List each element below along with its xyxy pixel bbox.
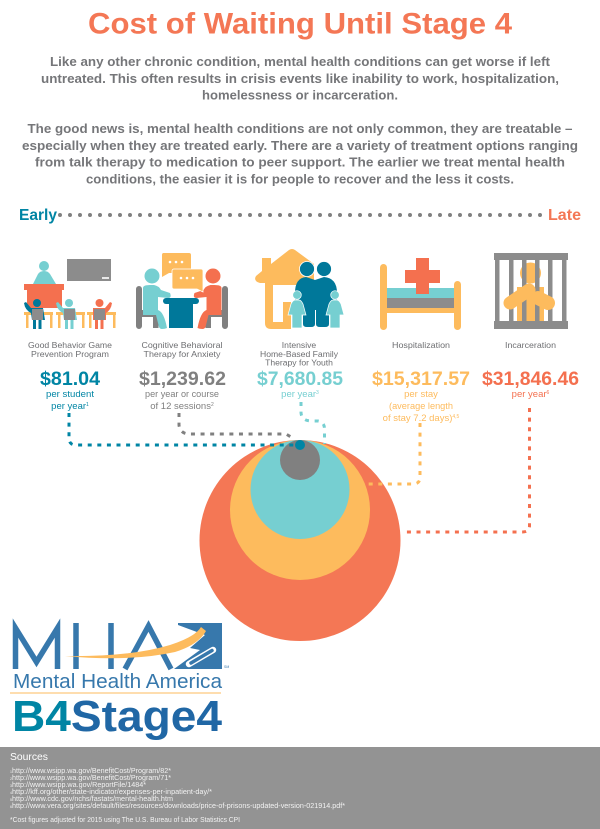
- logo: MHA: Mental Health America: [13, 671, 223, 693]
- column: intensive home-based family therapy: Home-Based Family: [260, 349, 339, 359]
- column: cognitive behavioral therapy: Therapy for Anxiety: [144, 349, 221, 359]
- column: cognitive behavioral therapy: 2: [211, 402, 214, 408]
- intro text block: The good news is, mental health conditions are not only common, they are treatable –: [28, 122, 573, 136]
- column: intensive home-based family therapy: $7,680.85: [257, 369, 343, 390]
- column: incarceration: per year: [512, 389, 547, 400]
- logo: MHA: SM: [224, 665, 229, 669]
- sources panel: http://kff.org/other/state-indicator/expenses-per-inpatient-day/*: [12, 789, 212, 796]
- column: good behavior game: per year: [51, 401, 86, 412]
- column: cognitive behavioral therapy: [139, 340, 226, 412]
- intro text block: homelessness or incarceration.: [202, 88, 398, 102]
- intro text block: [22, 55, 578, 186]
- title: Cost of Waiting Until Stage 4: [88, 8, 512, 40]
- nested cost circles: [200, 440, 400, 641]
- column: hospitalization: per stay: [404, 389, 438, 400]
- column: cognitive behavioral therapy: $1,239.62: [139, 369, 226, 390]
- sources panel: [0, 747, 600, 829]
- logo: MHA: [10, 623, 229, 741]
- column: good behavior game: per student: [46, 389, 94, 400]
- sources panel: 5: [10, 798, 12, 802]
- early to late timeline: Late: [548, 207, 581, 224]
- column: hospitalization: Hospitalization: [392, 340, 450, 350]
- sources panel: 6: [10, 805, 12, 809]
- sources panel: http://www.wsipp.wa.gov/BenefitCost/Program/71*: [12, 775, 171, 782]
- intro text block: untreated. This often results in crisis events like inability to work, hospitalization,: [41, 72, 559, 86]
- column: good behavior game: Prevention Program: [31, 349, 109, 359]
- intro text block: Like any other chronic condition, mental health conditions can get worse if left: [50, 55, 551, 69]
- column: incarceration: 6: [547, 390, 550, 396]
- early to late timeline: [19, 207, 581, 224]
- column: hospitalization: (average length: [389, 401, 453, 412]
- icon: therapy session: [136, 253, 228, 329]
- column: incarceration: [482, 340, 579, 400]
- sources panel: 3: [10, 784, 12, 788]
- column: intensive home-based family therapy: Therapy for Youth: [265, 358, 333, 368]
- column: incarceration: $31,846.46: [482, 369, 579, 390]
- sources panel: 4: [10, 791, 12, 795]
- column: cognitive behavioral therapy: per year or course: [145, 389, 219, 400]
- icon: prison bars: [494, 253, 568, 329]
- intro text block: from talk therapy to medication to peer support. The earlier we treat mental health: [35, 156, 565, 170]
- column: hospitalization: of stay 7.2 days): [383, 413, 452, 424]
- icon: hospital bed: [380, 258, 461, 330]
- sources panel: http://www.vera.org/sites/default/files/resources/downloads/price-of-prisons-updated-version-021914.pdf*: [12, 803, 345, 810]
- column: cognitive behavioral therapy: of 12 sessions: [150, 401, 211, 412]
- column: good behavior game: $81.04: [40, 369, 100, 390]
- column: incarceration: Incarceration: [505, 340, 556, 350]
- column: hospitalization: [372, 340, 470, 424]
- intro text block: conditions, the easier it is for people to recover and the less it costs.: [86, 172, 514, 186]
- column: good behavior game: Good Behavior Game: [28, 340, 112, 350]
- column: cognitive behavioral therapy: Cognitive Behavioral: [142, 340, 223, 350]
- column: good behavior game: [28, 340, 112, 412]
- sources panel: http://www.cdc.gov/nchs/fastats/mental-health.htm: [12, 796, 173, 803]
- column: hospitalization: 4,5: [452, 414, 460, 420]
- sources panel: http://www.wsipp.wa.gov/ReportFile/1484*: [12, 782, 146, 789]
- sources panel: 2: [10, 777, 12, 781]
- column: good behavior game: 1: [86, 402, 89, 408]
- column: intensive home-based family therapy: [257, 340, 343, 400]
- sources panel: *Cost figures adjusted for 2015 using The U.S. Bureau of Labor Statistics CPI: [10, 817, 240, 824]
- sources panel: Sources: [10, 751, 48, 763]
- icon: family home: [255, 249, 344, 329]
- early to late timeline: Early: [19, 207, 57, 224]
- sources panel: 1: [10, 770, 12, 774]
- column: intensive home-based family therapy: per year: [281, 389, 316, 400]
- logo: MHA: B4Stage4: [12, 692, 223, 741]
- dotted connectors: [69, 402, 530, 532]
- column: intensive home-based family therapy: Intensive: [282, 340, 316, 350]
- icon: classroom: [24, 259, 116, 329]
- intro text block: especially when they are treated early. There are a variety of treatment options ranging: [22, 139, 578, 153]
- sources panel: http://www.wsipp.wa.gov/BenefitCost/Program/82*: [12, 768, 171, 775]
- column: intensive home-based family therapy: 3: [316, 390, 319, 396]
- column: hospitalization: $15,317.57: [372, 369, 470, 390]
